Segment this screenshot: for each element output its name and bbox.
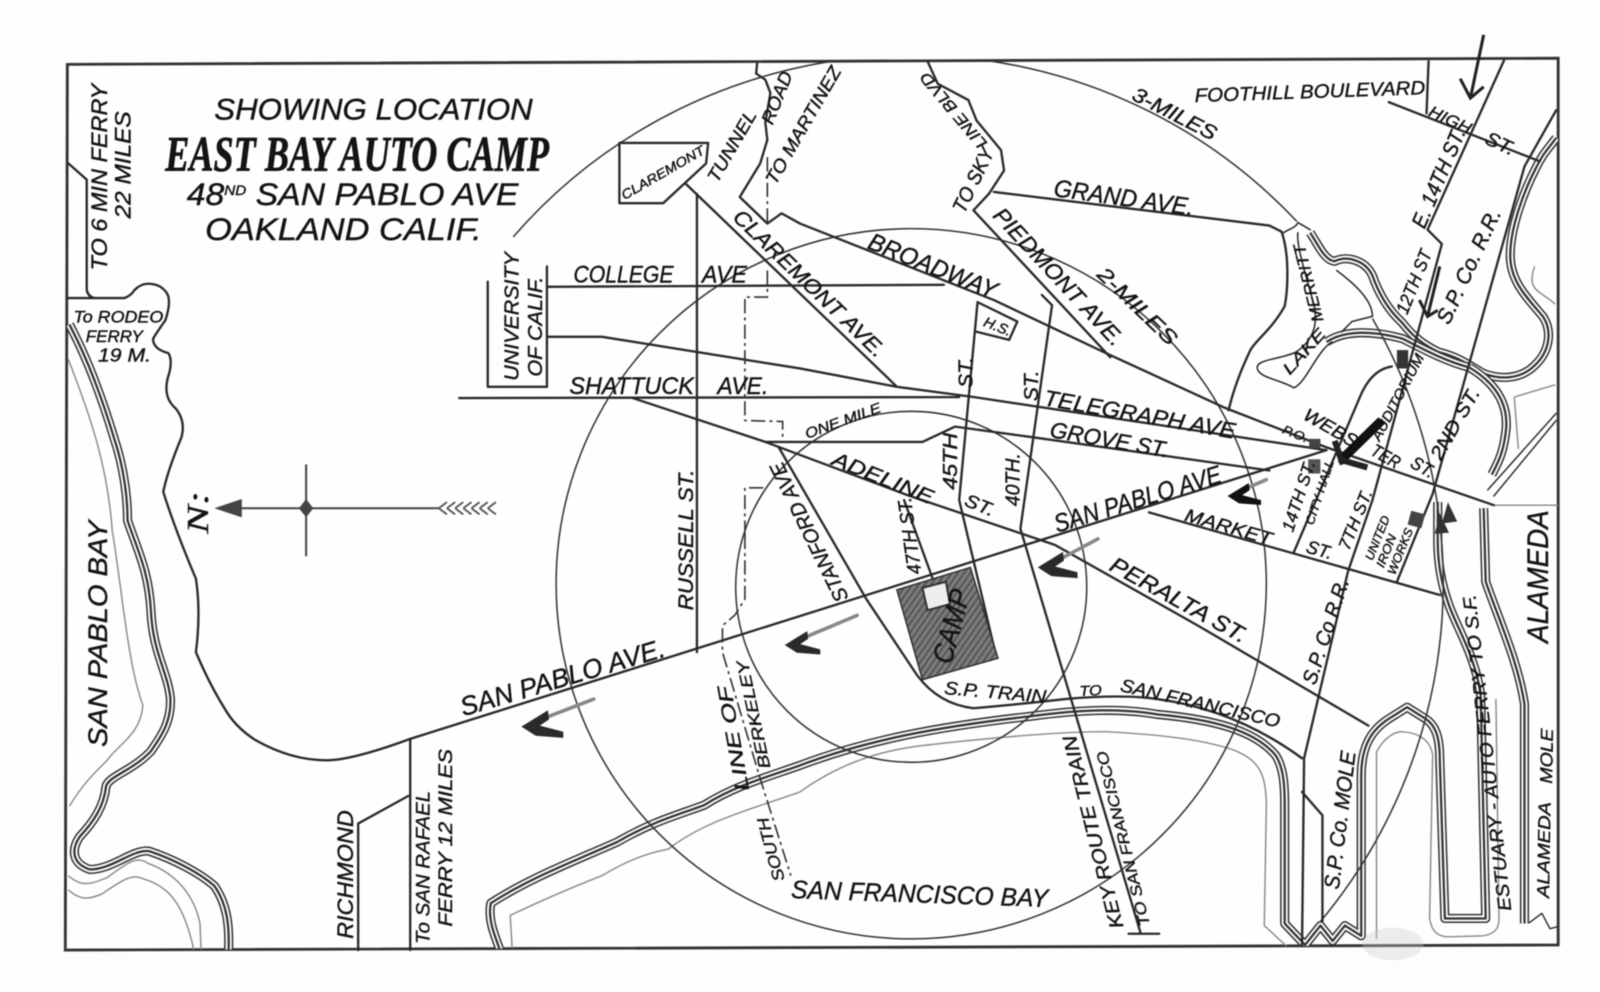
label: 45th St: ST. bbox=[955, 357, 977, 388]
one mile circle bbox=[736, 411, 1087, 762]
label: Broadway: BROADWAY bbox=[864, 229, 1002, 305]
label: Merritt: MERRITT bbox=[1290, 241, 1327, 324]
University box bbox=[488, 266, 547, 387]
label: San Rafael: To SAN RAFAEL bbox=[413, 791, 435, 944]
label: Adeline: ADELINE bbox=[828, 448, 937, 509]
label: S.P. Co R.R. upper: S.P. Co. R.R. bbox=[1432, 205, 1506, 328]
label: Telegraph Ave: TELEGRAPH AVE bbox=[1042, 385, 1238, 444]
14th St curve bbox=[1294, 366, 1392, 552]
Richmond and San Rafael roads bbox=[358, 739, 410, 950]
label: Ave.: AVE. bbox=[715, 373, 768, 400]
label: Foothill Boulevard: FOOTHILL BOULEVARD bbox=[1194, 77, 1426, 107]
label: San Pablo Ave east: SAN PABLO AVE bbox=[1051, 461, 1226, 538]
label: San Francisco Bay: SAN FRANCISCO BAY bbox=[791, 876, 1050, 913]
label: ter: TER bbox=[1367, 439, 1404, 473]
hatched camp area bbox=[897, 567, 998, 680]
label: High: HIGH bbox=[1426, 103, 1474, 138]
label: 2 Miles: 2-MILES bbox=[1092, 262, 1181, 350]
label: 22 miles: 22 MILES bbox=[111, 111, 136, 220]
Market St bbox=[1149, 512, 1440, 595]
landmark markers bbox=[1308, 350, 1425, 960]
label: Webster St: ST. bbox=[1407, 452, 1439, 482]
label: 14th St: 14TH ST. bbox=[1278, 458, 1319, 534]
label: 7th St: 7TH ST. bbox=[1334, 486, 1376, 553]
three mile arcs bbox=[513, 55, 1443, 922]
Foothill and High St bbox=[1389, 61, 1540, 161]
label: Claremont Ave: CLAREMONT AVE. bbox=[728, 205, 890, 362]
S.P. Co upper railroad bbox=[1397, 110, 1556, 582]
label: of Calif: OF CALIF. bbox=[525, 277, 547, 377]
label: Alameda Mole lower: ALAMEDA bbox=[1533, 802, 1555, 899]
title block bbox=[165, 93, 549, 247]
label: Berkeley: BERKELEY bbox=[734, 657, 774, 770]
label: San Pablo Bay: SAN PABLO BAY bbox=[83, 518, 113, 747]
label: 3 Miles: 3-MILES bbox=[1128, 84, 1221, 145]
label: Mole: MOLE bbox=[1536, 728, 1557, 784]
label: Adeline St: ST. bbox=[962, 489, 998, 520]
two mile circle bbox=[556, 229, 1266, 939]
label: Alameda: ALAMEDA bbox=[1522, 510, 1555, 645]
mile-radius circles bbox=[513, 55, 1443, 939]
label: Richmond: RICHMOND bbox=[333, 810, 358, 939]
label: Russell St: RUSSELL ST. bbox=[674, 469, 698, 610]
label: Market St: ST. bbox=[1304, 536, 1335, 563]
label: Lake: LAKE bbox=[1279, 324, 1331, 378]
label: Peralta St: PERALTA ST. bbox=[1106, 552, 1252, 648]
label: Iron: IRON bbox=[1373, 532, 1400, 570]
label: United: UNITED bbox=[1362, 514, 1393, 562]
label: College: COLLEGE bbox=[573, 262, 674, 289]
direction arrows bbox=[521, 35, 1484, 738]
label: Rodeo ferry: To RODEO bbox=[73, 309, 164, 327]
label: 19 M: 19 M. bbox=[98, 344, 151, 365]
label: South: SOUTH bbox=[754, 815, 789, 883]
label: H.S.: H.S. bbox=[981, 314, 1014, 340]
label: Tunnel: TUNNEL bbox=[703, 106, 761, 186]
label: City Hall: CITY HALL bbox=[1303, 458, 1337, 527]
label: Stanford Ave: STANFORD AVE bbox=[766, 458, 853, 605]
label: 12th St: 12TH ST bbox=[1391, 245, 1437, 317]
compass: north arrow bbox=[181, 464, 496, 556]
label: Line Blvd: LINE BLVD bbox=[917, 68, 991, 152]
label: To Sky: TO SKY bbox=[949, 143, 1000, 217]
Skyline and Piedmont bbox=[928, 61, 1110, 357]
label: P.O.: P.O. bbox=[1281, 423, 1310, 445]
label: University: UNIVERSITY bbox=[501, 251, 523, 381]
label: E 14th St: E. 14TH ST. bbox=[1407, 125, 1471, 232]
label: Auditorium: AUDITORIUM bbox=[1368, 351, 1428, 445]
title line 1: SHOWING LOCATION bbox=[214, 93, 533, 126]
label: 40th St: ST. bbox=[1021, 370, 1043, 401]
label: 47th St: 47TH ST. bbox=[894, 496, 926, 576]
label: ferry line: FERRY bbox=[86, 328, 144, 346]
label: Market: MARKET bbox=[1183, 504, 1277, 550]
Grove St bbox=[765, 427, 1269, 470]
label: Ave: AVE bbox=[700, 262, 748, 289]
label: 2nd St: 2ND ST. bbox=[1426, 384, 1485, 465]
label: Road: ROAD bbox=[757, 68, 797, 127]
47th, 45th and H.S. bbox=[904, 302, 1017, 655]
label: S.P. Co Mole: S.P. Co. MOLE bbox=[1320, 749, 1361, 890]
water: bays, lake and estuary shorelines bbox=[68, 138, 1558, 950]
label: Grove St: GROVE ST. bbox=[1048, 417, 1171, 463]
title main: EAST BAY AUTO CAMP bbox=[165, 125, 549, 181]
label: Piedmont Ave: PIEDMONT AVE. bbox=[988, 203, 1129, 351]
label: Works: WORKS bbox=[1385, 525, 1416, 577]
address line: ND bbox=[224, 183, 246, 199]
label: Grand Ave: GRAND AVE. bbox=[1052, 175, 1195, 222]
label: To San Francisco: TO SAN FRANCISCO bbox=[1094, 749, 1154, 928]
label: San Pablo Ave west: SAN PABLO AVE. bbox=[456, 633, 668, 722]
shoreline and San Pablo Ave bbox=[67, 163, 1327, 760]
address line: SAN PABLO AVE bbox=[246, 176, 519, 212]
label: Webs: WEBS bbox=[1300, 404, 1362, 452]
label: One Mile: ONE MILE bbox=[803, 400, 884, 443]
label: 45th: 45TH bbox=[940, 432, 962, 490]
Stanford Ave and S.P. Train bbox=[779, 447, 1302, 758]
Tunnel Road bbox=[740, 63, 1494, 505]
College, Telegraph and Shattuck bbox=[459, 285, 1326, 450]
label: 40th: 40TH. bbox=[1002, 453, 1024, 506]
camp label: CAMP bbox=[927, 586, 977, 667]
label: ferry: TO 6 MIN FERRY bbox=[87, 82, 112, 270]
E 14th St and S.P. rail bbox=[1302, 60, 1504, 946]
city line: OAKLAND CALIF. bbox=[205, 211, 482, 247]
label: S.P. Co R.R. lower: S.P. Co R.R. bbox=[1299, 576, 1354, 687]
Grand Ave and lake shore bbox=[994, 192, 1287, 410]
label: Shattuck: SHATTUCK bbox=[569, 373, 695, 400]
40th and Key Route bbox=[1020, 295, 1159, 934]
north label: N: bbox=[181, 491, 215, 535]
label: San Francisco train: SAN FRANCISCO bbox=[1118, 674, 1282, 732]
label: Key Route Train: KEY ROUTE TRAIN bbox=[1059, 733, 1128, 931]
label: Claremont: CLAREMONT bbox=[618, 142, 708, 203]
label: To Martinez: TO MARTINEZ bbox=[761, 62, 846, 188]
label: S.P. Train: S.P. TRAIN bbox=[944, 677, 1048, 707]
label: Line of: LINE OF bbox=[714, 683, 754, 793]
Claremont box and avenue bbox=[619, 143, 896, 652]
camp block bbox=[897, 567, 998, 680]
label: Estuary ferry: ESTUARY - AUTO FERRY TO S.F. bbox=[1458, 594, 1515, 912]
camp office bbox=[922, 582, 950, 610]
Adeline and Peralta bbox=[633, 398, 1368, 726]
label: To: TO bbox=[1079, 683, 1102, 700]
Berkeley line bbox=[722, 157, 791, 876]
label: ferry 12 miles: FERRY 12 MILES bbox=[435, 749, 457, 927]
address line: 48 bbox=[187, 176, 222, 212]
label: High St: ST. bbox=[1482, 128, 1519, 160]
